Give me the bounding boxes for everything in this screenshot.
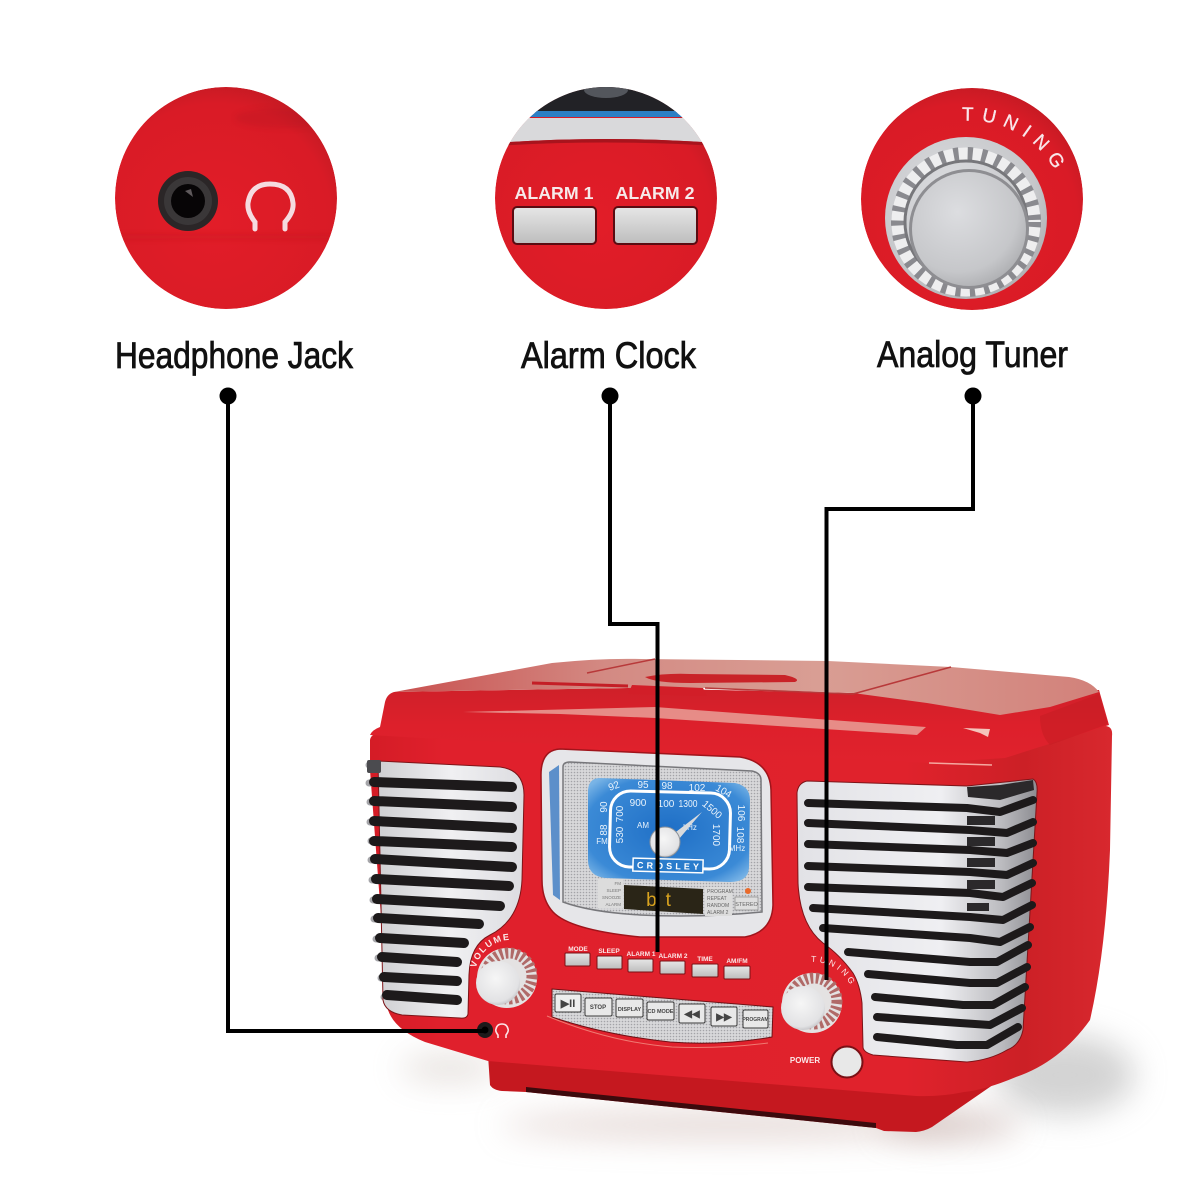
- left indicator labels: [598, 879, 623, 908]
- dial am numbers: 700: [615, 805, 626, 822]
- button: alarm 1 small: [627, 951, 656, 972]
- button: mode: [565, 946, 590, 966]
- circle: alarm buttons detail: [495, 82, 717, 309]
- circle: tuning knob detail: [861, 88, 1083, 310]
- bezel blue reflection: [549, 765, 560, 900]
- button: sleep: [597, 948, 622, 969]
- leader line: alarm clock: [602, 388, 658, 952]
- button: alarm 2 small: [659, 953, 688, 974]
- knob cap: [909, 169, 1029, 289]
- button: time: [692, 956, 718, 977]
- button: alarm 1: [513, 207, 596, 244]
- lid top surface: [394, 659, 1099, 715]
- right grille dark reflections: [967, 780, 1034, 911]
- volume knob: [470, 934, 538, 1008]
- crosley badge: [633, 858, 703, 873]
- button: previous: ◀◀: [683, 1009, 700, 1020]
- dial fm numbers: 98: [661, 781, 673, 792]
- leader line: headphone jack: [220, 388, 485, 1031]
- dial am numbers: 530: [615, 826, 626, 843]
- left chrome plate: [378, 761, 524, 1018]
- button: program: PROGRAM: [742, 1017, 769, 1023]
- dial fm numbers: 95: [637, 780, 649, 791]
- cd control strip: [552, 989, 773, 1043]
- dial am numbers: kHz: [683, 823, 697, 832]
- needle hub: [650, 827, 680, 857]
- left indicator labels: SLEEP: [606, 888, 621, 893]
- dial fm numbers: FM: [596, 837, 608, 846]
- knob base: [885, 137, 1047, 299]
- right chrome plate: [797, 779, 1037, 1062]
- dial fm numbers: 90: [599, 801, 610, 813]
- text: alarm 1 label: ALARM 1: [514, 183, 594, 203]
- knob crown teeth: [898, 154, 1034, 290]
- text: tuning arc label: TUNING: [962, 107, 1064, 168]
- right indicator labels: PROGRAM: [707, 889, 733, 895]
- button: alarm 2 small: ALARM 2: [659, 953, 688, 960]
- button: next: ▶▶: [715, 1012, 733, 1023]
- tuning knob: [781, 956, 854, 1033]
- left indicator labels: ALARM: [605, 902, 621, 907]
- left indicator labels: FM: [614, 881, 621, 886]
- button: stop: STOP: [590, 1005, 606, 1011]
- led display: bt: [646, 890, 680, 911]
- top button row: [565, 946, 750, 979]
- right speaker grille: [797, 779, 1037, 1062]
- dial am numbers: 1700: [710, 824, 721, 847]
- button: am/fm: AM/FM: [726, 958, 748, 965]
- strip lower highlight: [547, 1016, 768, 1048]
- button: cd mode: CD MODE: [648, 1009, 674, 1015]
- button: previous: [679, 1004, 705, 1023]
- button: display: DISPLAY: [618, 1007, 641, 1013]
- left grille slots: [374, 782, 512, 1000]
- button: sleep: SLEEP: [598, 948, 620, 955]
- icon: headphones glyph: [248, 184, 293, 229]
- dial am numbers: 1300: [678, 799, 698, 810]
- dial am numbers: 900: [630, 798, 647, 809]
- left indicator labels: SNOOZE: [602, 895, 621, 900]
- dial am numbers: AM: [637, 821, 649, 830]
- dial bezel: [541, 749, 773, 937]
- button: am/fm: [724, 958, 750, 979]
- power button: [790, 1046, 862, 1078]
- radio product illustration: [366, 658, 1144, 1158]
- dial inner panel: [563, 762, 762, 916]
- dial fm numbers: 108: [734, 827, 745, 844]
- dial fm numbers: 88: [599, 824, 610, 836]
- blue tuner dial: [588, 778, 750, 882]
- small headphone glyph on radio: [496, 1024, 508, 1038]
- button: time: TIME: [697, 956, 713, 963]
- right indicator labels: ALARM 2: [707, 910, 729, 916]
- dial fm numbers: 106: [735, 805, 746, 822]
- button: cd mode: [647, 1002, 674, 1020]
- lid seams and highlights: [463, 659, 1108, 765]
- left speaker grille: [367, 760, 524, 1018]
- led display: [624, 885, 703, 914]
- right indicator labels: RANDOM: [707, 903, 729, 909]
- headphone socket on radio: [477, 1022, 493, 1038]
- top left fin cap: [367, 760, 381, 773]
- dial fm numbers: 92: [607, 779, 622, 794]
- button: stop: [585, 998, 612, 1016]
- heading: headphone jack: Headphone Jack: [115, 335, 353, 376]
- cd buttons: [555, 994, 769, 1028]
- stereo indicator: STEREO: [735, 902, 759, 908]
- text: tuning label: TUNING: [811, 956, 854, 984]
- text: power label: POWER: [790, 1056, 820, 1065]
- text: volume label: VOLUME: [470, 934, 509, 966]
- button: program: [742, 1010, 769, 1028]
- dial fm numbers: 102: [689, 783, 706, 794]
- circle: headphone jack detail: [115, 87, 337, 309]
- button: play pause: ▶II: [560, 998, 575, 1010]
- dial fm numbers: [596, 779, 746, 853]
- lid front edge: [370, 688, 1109, 763]
- right indicator labels: REPEAT: [707, 896, 727, 902]
- right indicator labels: [705, 887, 733, 916]
- text: alarm 2 label: ALARM 2: [616, 183, 695, 203]
- heading: analog tuner: Analog Tuner: [877, 334, 1068, 375]
- dial am numbers: 100: [658, 799, 675, 810]
- button: alarm 2: [614, 207, 697, 244]
- button: mode: MODE: [568, 946, 588, 953]
- button: play pause: [555, 994, 581, 1012]
- dial am numbers: [615, 798, 724, 847]
- radio base: [488, 1055, 1000, 1132]
- button: alarm 1 small: ALARM 1: [627, 951, 656, 958]
- heading: alarm clock: Alarm Clock: [521, 335, 696, 376]
- dial fm numbers: MHz: [729, 844, 745, 853]
- leader line: analog tuner: [826, 388, 982, 980]
- icon: jack socket: [158, 171, 218, 231]
- button: next: [711, 1007, 737, 1026]
- tuning needle: [668, 812, 702, 846]
- right grille slots: [808, 800, 1033, 1045]
- button: display: [616, 999, 643, 1017]
- radio body: [370, 726, 1112, 1096]
- crosley badge: CROSLEY: [637, 860, 699, 872]
- dial am numbers: 1500: [700, 799, 724, 822]
- left chrome fins: [369, 765, 395, 997]
- base recess: [526, 1087, 876, 1128]
- stereo indicator: [735, 888, 759, 910]
- dial fm numbers: 104: [713, 783, 734, 801]
- floor shadow: [400, 1035, 1135, 1139]
